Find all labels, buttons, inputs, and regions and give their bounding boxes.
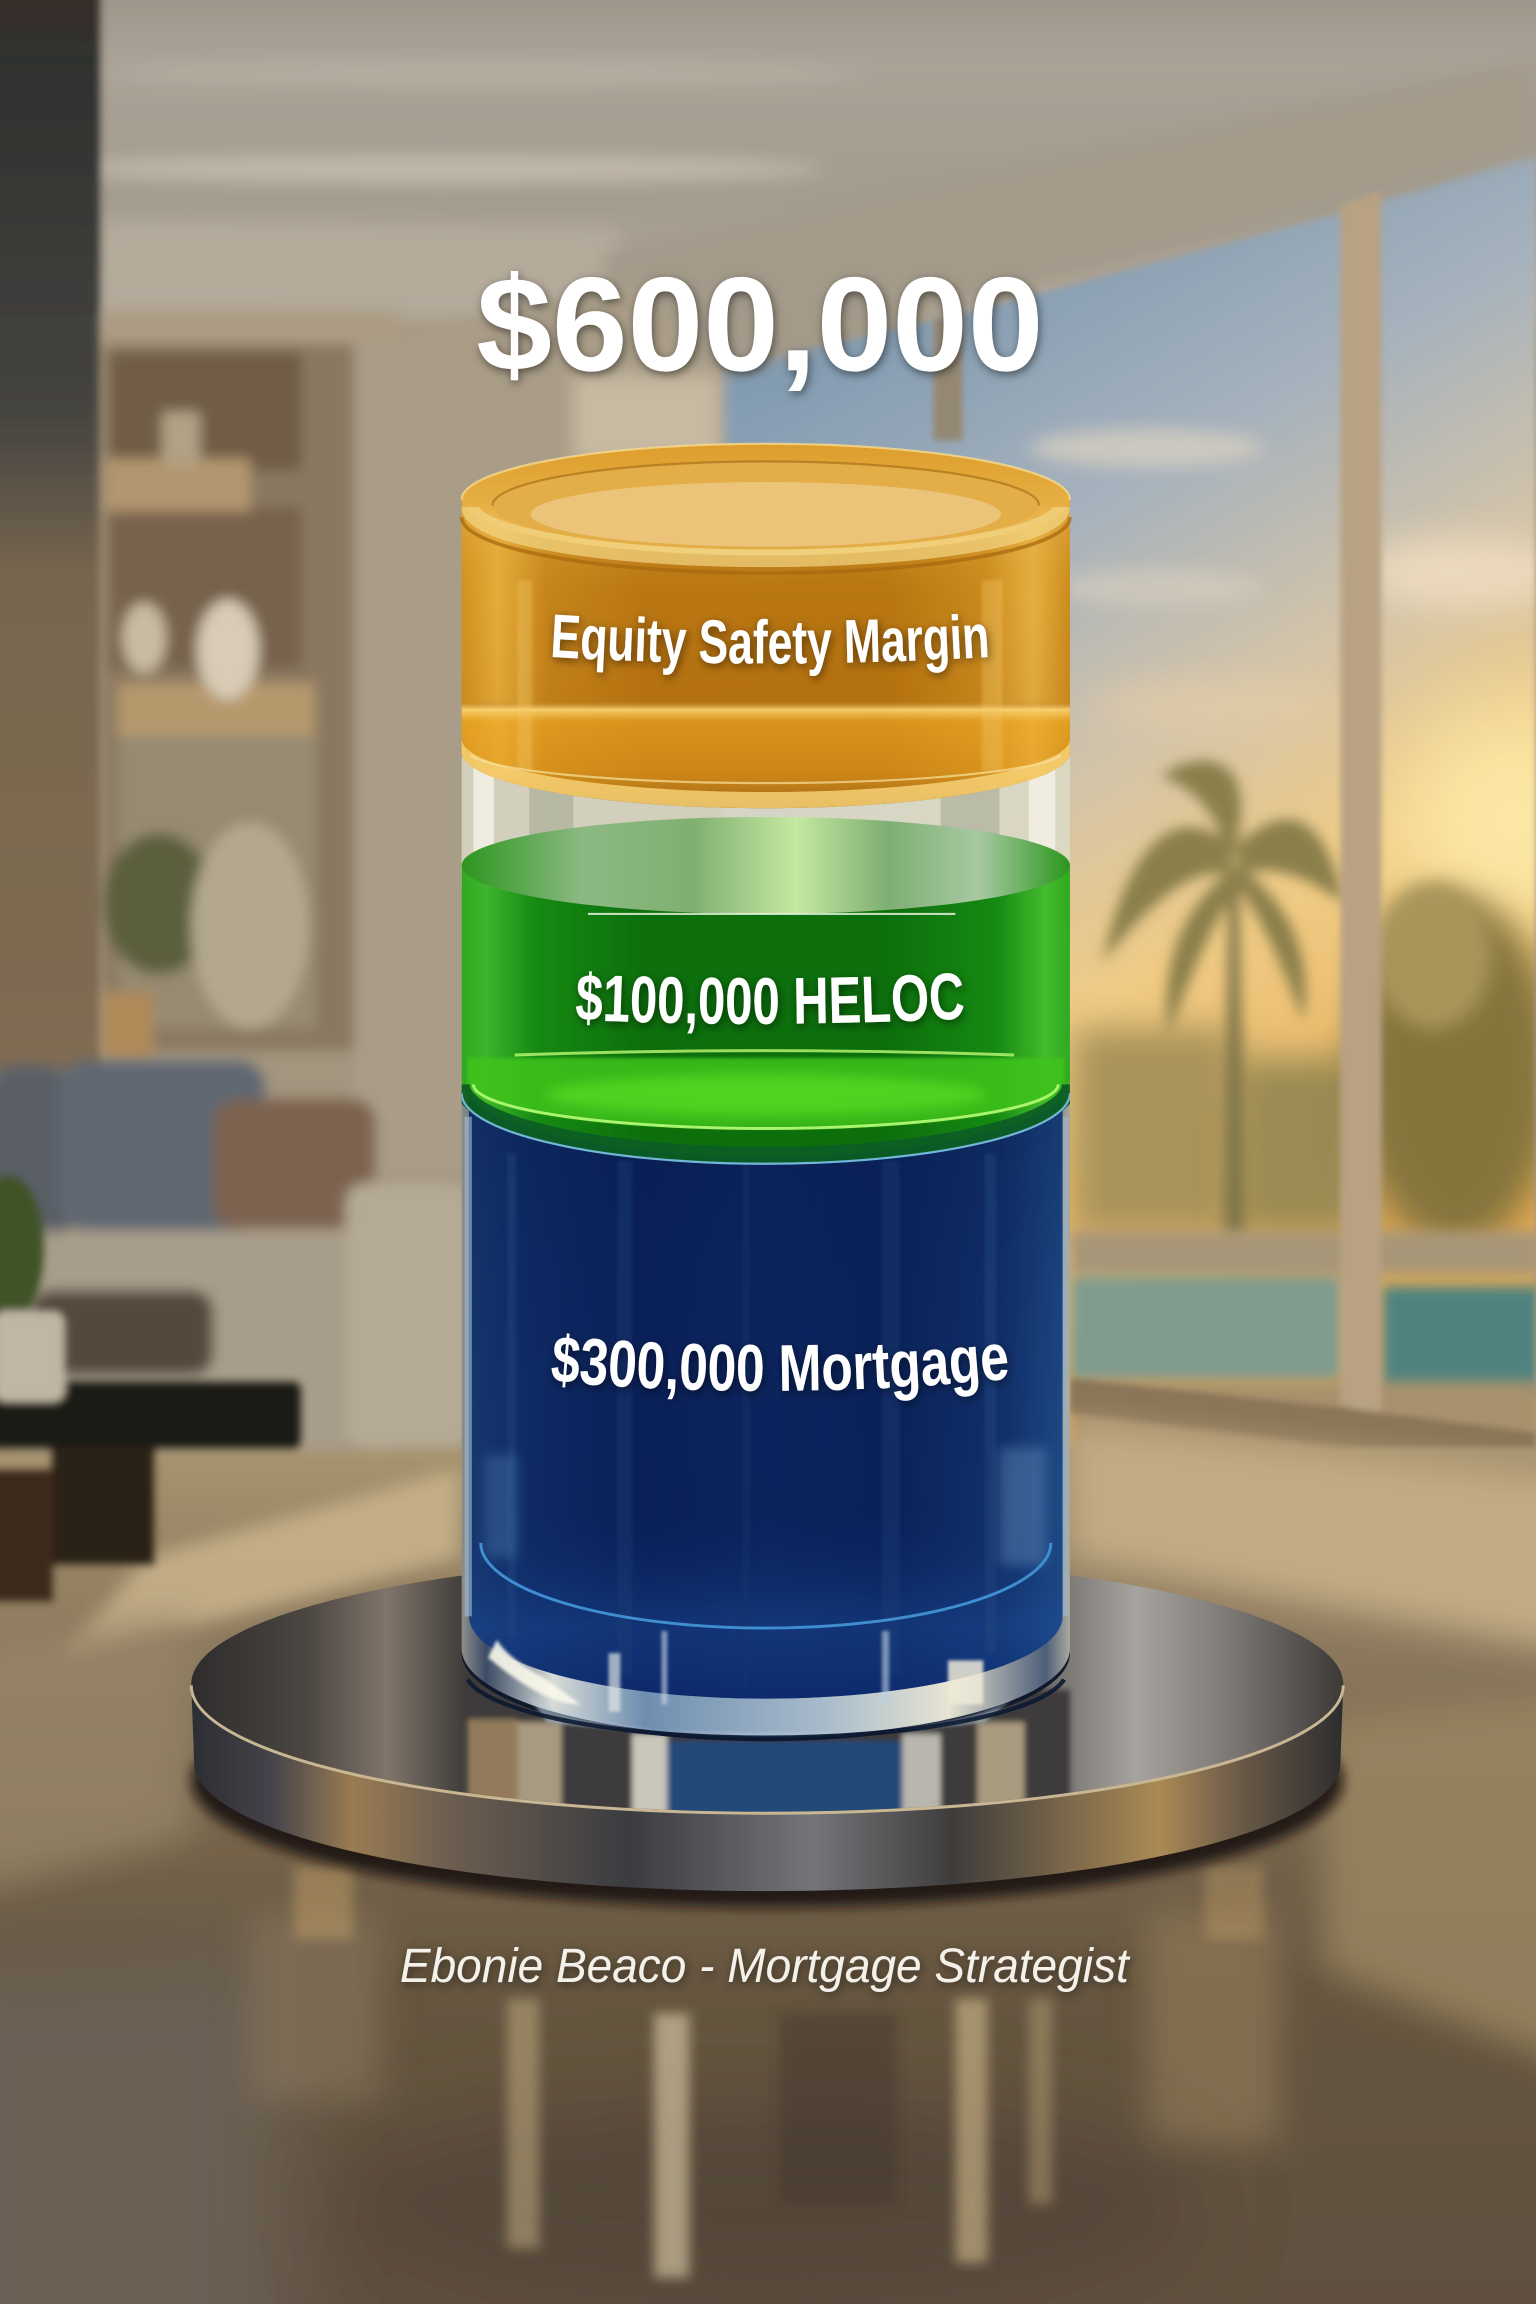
cylinder stack	[462, 444, 1070, 1741]
green glow band	[468, 1058, 1064, 1128]
gold bottom ring	[462, 739, 1070, 808]
green layer: HELOC	[462, 817, 1070, 1164]
ceiling	[0, 0, 1536, 323]
blue layer: mortgage	[462, 1079, 1070, 1741]
pool	[1070, 1275, 1342, 1381]
window beam	[603, 59, 1536, 379]
label: mortgage: $300,000 Mortgage	[550, 1333, 1012, 1407]
floor reflections	[294, 1866, 1264, 2278]
label: equity safety margin: Equity Safety Margin	[549, 612, 995, 684]
stone pillar	[0, 0, 100, 1073]
author credit: Ebonie Beaco - Mortgage Strategist	[400, 1939, 1131, 1993]
title: total value: $600,000	[476, 250, 1044, 399]
palm tree	[1102, 761, 1345, 1234]
wall	[353, 279, 720, 1176]
window frames	[933, 191, 1536, 1477]
platform: metal disc	[191, 1556, 1343, 1907]
window with sky	[720, 132, 1536, 1477]
gold rim	[462, 444, 1070, 555]
shelves	[103, 312, 397, 1058]
base glints	[488, 1631, 1014, 1736]
sofa	[0, 1061, 470, 1449]
floor	[0, 1425, 1536, 2304]
coffee table and plant	[0, 1176, 301, 1602]
cylinder reflection on disc	[468, 1690, 1070, 1825]
label: HELOC: $100,000 HELOC	[574, 971, 968, 1038]
gold layer: safety margin	[462, 444, 1070, 808]
clear glass upper section	[462, 757, 1070, 889]
